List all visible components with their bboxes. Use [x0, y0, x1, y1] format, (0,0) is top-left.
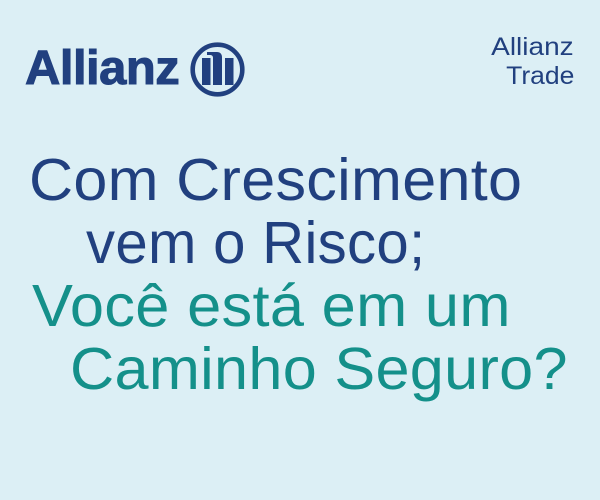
logo: Allianz: [25, 42, 245, 97]
heading line: Caminho Seguro?: Caminho Seguro?: [70, 336, 568, 402]
brand label line: Allianz: Allianz: [492, 33, 574, 61]
heading line: Você está em um: Você está em um: [32, 273, 511, 339]
brand label: Allianz Trade: [491, 33, 574, 90]
brand label line: Trade: Trade: [506, 62, 574, 90]
logo wordmark: Allianz: [25, 42, 179, 95]
heading line: vem o Risco;: vem o Risco;: [86, 210, 425, 276]
icon: Allianz eagle roundel: [190, 42, 245, 97]
heading line: Com Crescimento: Com Crescimento: [29, 147, 522, 213]
